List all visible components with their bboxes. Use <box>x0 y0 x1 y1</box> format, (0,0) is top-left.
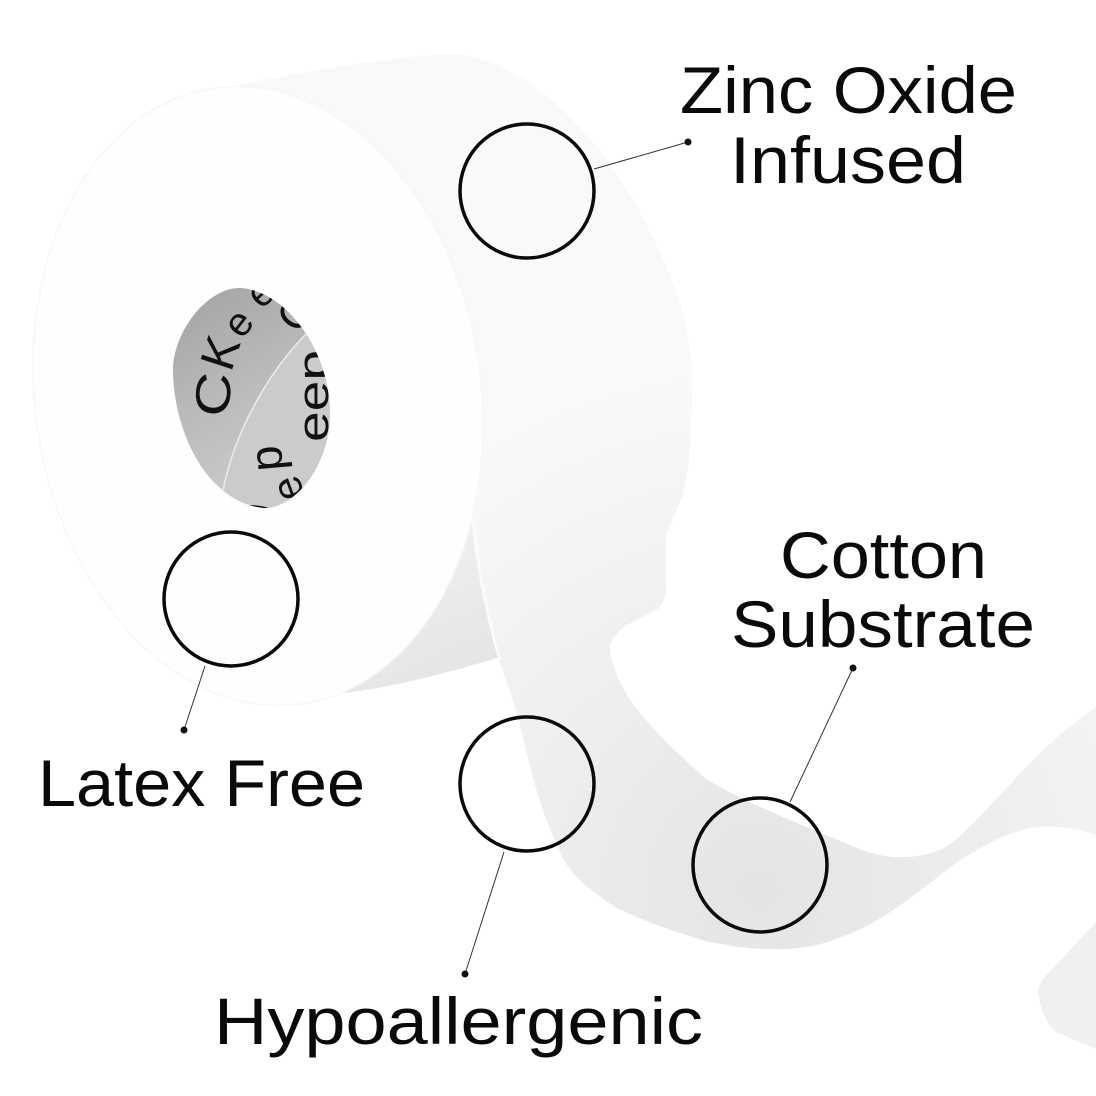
leader dot <box>180 726 188 734</box>
core printed logo: K <box>191 330 251 376</box>
core printed logo: p <box>239 444 293 474</box>
callout: hypoallergenic <box>214 717 703 1058</box>
core printed logo: eep <box>289 350 338 442</box>
leader line <box>790 668 853 802</box>
leader dot <box>462 970 468 978</box>
core hole <box>173 288 330 508</box>
core printed logo: C <box>184 370 242 419</box>
label: Zinc Oxide <box>680 53 1017 127</box>
ring <box>164 532 298 666</box>
lower right tape end <box>1038 922 1096 1049</box>
callout: cotton substrate <box>693 518 1035 932</box>
roll shadow band <box>300 521 500 693</box>
ring <box>460 124 594 258</box>
core printed logo: e <box>261 470 313 508</box>
leader line <box>594 142 688 169</box>
core printed logo: C <box>267 286 325 341</box>
tape roll and unrolled strip <box>162 122 1096 1049</box>
ring <box>460 717 594 851</box>
callout: latex free <box>38 532 365 820</box>
ring <box>693 798 827 932</box>
leader line <box>184 666 205 730</box>
callout: zinc oxide infused <box>460 53 1017 258</box>
strip edge highlight <box>473 521 500 660</box>
label: Cotton <box>780 518 987 592</box>
leader dot <box>684 138 692 146</box>
label: Hypoallergenic <box>214 984 703 1058</box>
roll front face <box>0 57 522 735</box>
roll side and strip <box>223 54 1096 949</box>
core printed logo: e <box>238 269 284 317</box>
label: Infused <box>730 123 966 197</box>
label: Substrate <box>731 587 1035 661</box>
core printed logo: e <box>214 301 263 346</box>
label: Latex Free <box>38 746 365 820</box>
leader dot <box>850 664 856 672</box>
leader line <box>465 852 504 974</box>
core printed logo <box>196 290 328 508</box>
